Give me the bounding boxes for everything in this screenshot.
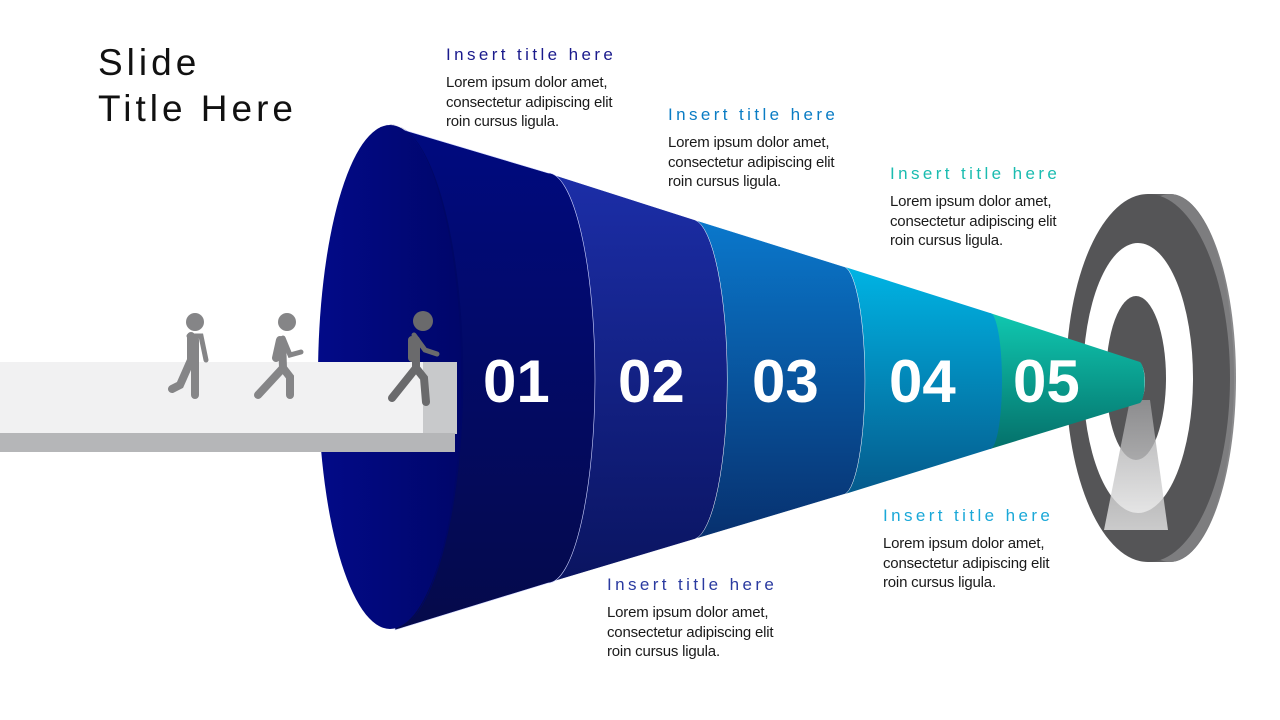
text block 5 — [607, 575, 777, 660]
funnel segment 2 — [548, 173, 727, 583]
text block 2: consectetur adipiscing elit — [668, 154, 834, 170]
text block 4: consectetur adipiscing elit — [883, 554, 1049, 572]
step numbers: 01 — [483, 348, 550, 415]
text block 4: Insert title here — [883, 506, 1053, 525]
step numbers: 04 — [889, 348, 956, 415]
step numbers — [483, 348, 1080, 415]
target — [1066, 194, 1236, 562]
text block 5: roin cursus ligula. — [607, 643, 720, 660]
text block 4: roin cursus ligula. — [883, 574, 996, 591]
text block 2: roin cursus ligula. — [668, 173, 781, 190]
text block 1: roin cursus ligula. — [446, 113, 559, 130]
slide title: Title Here — [98, 88, 297, 129]
person 1 — [172, 313, 206, 395]
text block 5: consectetur adipiscing elit — [607, 624, 773, 640]
text block 1: Lorem ipsum dolor amet, — [446, 74, 607, 91]
text block 1: Insert title here — [446, 45, 616, 64]
funnel segment 5 — [990, 313, 1145, 449]
text block 4: Lorem ipsum dolor amet, — [883, 535, 1044, 552]
person 3 — [392, 311, 437, 402]
slide title — [98, 42, 297, 129]
text block 3: roin cursus ligula. — [890, 232, 1003, 249]
funnel mouth — [318, 125, 463, 630]
text block 3: Lorem ipsum dolor amet, — [890, 193, 1051, 210]
funnel segment 1 — [387, 125, 595, 630]
walkway — [0, 362, 457, 452]
text block 3 — [890, 164, 1060, 249]
person 2 — [258, 313, 301, 395]
funnel segment 4 — [845, 267, 1002, 494]
funnel segment 3 — [695, 220, 865, 539]
text block 5: Insert title here — [607, 575, 777, 594]
text block 4 — [883, 506, 1053, 591]
text block 1 — [446, 45, 616, 130]
text block 2 — [668, 105, 838, 190]
step numbers: 02 — [618, 348, 685, 415]
text block 1: consectetur adipiscing elit — [446, 94, 612, 110]
text block 3: consectetur adipiscing elit — [890, 212, 1056, 230]
step numbers: 03 — [752, 348, 819, 415]
text block 3: Insert title here — [890, 164, 1060, 183]
text block 2: Insert title here — [668, 105, 838, 124]
slide title: Slide — [98, 42, 200, 83]
text block 2: Lorem ipsum dolor amet, — [668, 134, 829, 151]
text block 5: Lorem ipsum dolor amet, — [607, 604, 768, 621]
step numbers: 05 — [1013, 348, 1080, 415]
